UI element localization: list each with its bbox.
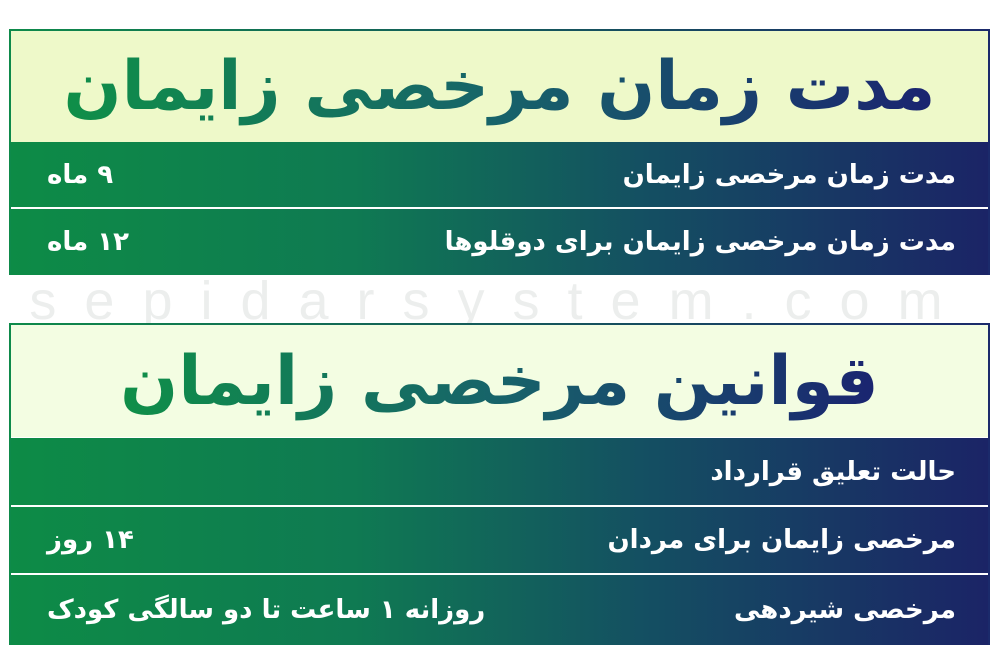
row: contract suspension: حالت تعلیق قرارداد: [710, 456, 956, 486]
row: twins: ۱۲ ماه: [47, 227, 129, 257]
title: duration: [11, 31, 988, 142]
row: twins: [11, 209, 988, 275]
row: men: مرخصی زایمان برای مردان: [607, 525, 956, 555]
panel: rules: [9, 323, 990, 645]
row: 9 months: [11, 142, 988, 207]
title: rules: قوانین مرخصی زایمان: [120, 342, 879, 420]
row: men: [11, 507, 988, 573]
row: contract suspension: [11, 438, 988, 505]
watermark: sepidarsystem.com: [29, 271, 971, 331]
row: 9 months: مدت زمان مرخصی زایمان: [623, 160, 956, 190]
panel: duration: [9, 29, 990, 275]
title: rules: [11, 325, 988, 437]
row: breastfeeding: روزانه ۱ ساعت تا دو سالگی کودک: [47, 595, 485, 625]
row: breastfeeding: [11, 575, 988, 645]
title: duration: مدت زمان مرخصی زایمان: [64, 47, 935, 126]
row: twins: مدت زمان مرخصی زایمان برای دوقلوها: [445, 227, 956, 257]
row: breastfeeding: مرخصی شیردهی: [734, 595, 956, 625]
row: 9 months: ۹ ماه: [47, 160, 113, 190]
row: men: ۱۴ روز: [47, 525, 134, 555]
